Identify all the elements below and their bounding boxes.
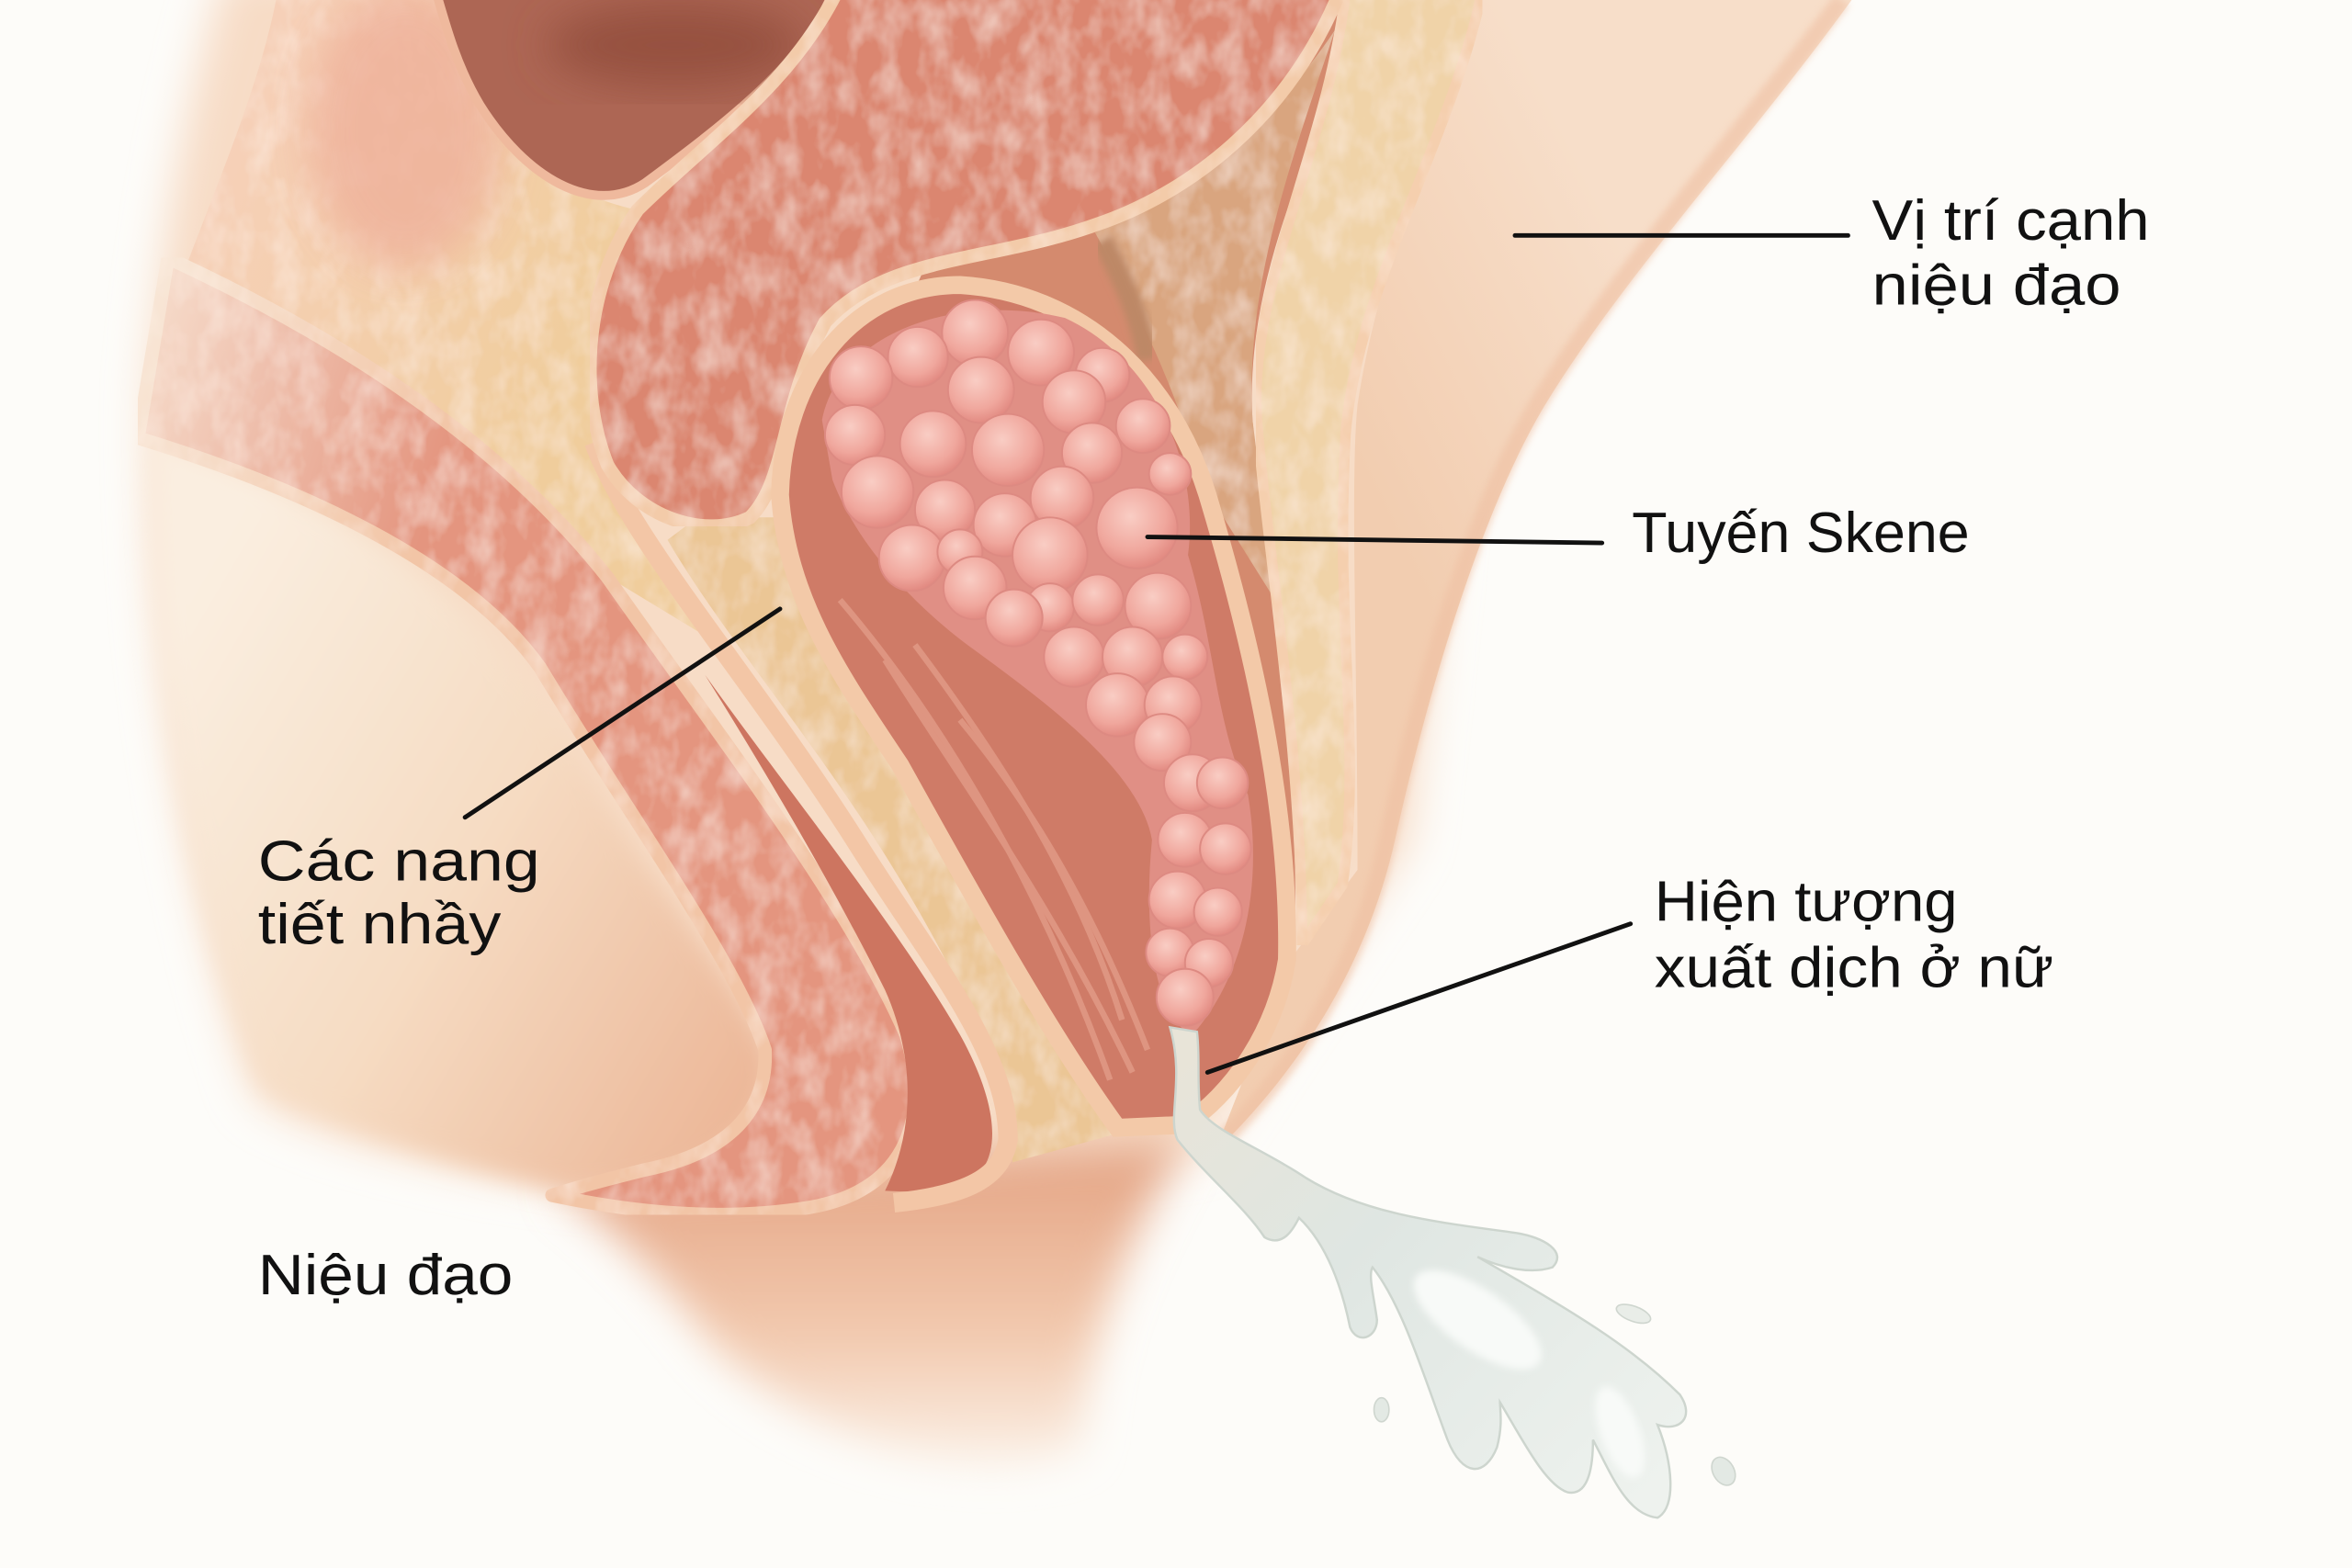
- label: Skene gland: Tuyến Skene: [1632, 502, 1970, 565]
- cavity shade: [548, 3, 802, 87]
- label: female ejaculation: Hiện tượng: [1655, 870, 1958, 933]
- label: paraurethral location: niệu đạo: [1872, 254, 2121, 317]
- Skene gland lobes: [825, 300, 1251, 1026]
- right wall edge shade: [1223, 0, 1842, 1140]
- label: paraurethral location: Vị trí cạnh: [1872, 189, 2150, 253]
- fat strip right: [1256, 0, 1482, 945]
- label: paraurethral location: [1872, 189, 2150, 317]
- tan shaded pocket: [1095, 30, 1335, 600]
- label: urethra: Niệu đạo: [258, 1244, 513, 1307]
- pocket muscle streaks: [840, 600, 1148, 1080]
- lower left tissue: [150, 435, 773, 1192]
- label: mucous follicles: [258, 829, 540, 956]
- label: mucous follicles: tiết nhầy: [258, 893, 501, 956]
- pocket dark crease: [1102, 240, 1148, 360]
- upper organ wall: [590, 0, 1342, 526]
- red muscle layer: [705, 675, 992, 1191]
- gland pocket: [780, 285, 1287, 1128]
- lower tissue fade: [555, 1140, 1185, 1463]
- lower-left wall band: [138, 258, 915, 1214]
- right skin wall: [1215, 0, 1857, 1152]
- dark upper cavity: [435, 0, 834, 196]
- label: female ejaculation: xuất dịch ở nữ: [1655, 936, 2053, 999]
- gland base: [822, 310, 1253, 1035]
- deep tissue behind gland: [780, 0, 1350, 1140]
- label: female ejaculation: [1655, 870, 2053, 999]
- second thin layer: [594, 443, 1008, 1202]
- label: mucous follicles: Các nang: [258, 829, 540, 893]
- fluid discharge: [1170, 1027, 1740, 1517]
- leader lines: [465, 235, 1848, 1072]
- upper pink mottling: [308, 0, 503, 270]
- tan connective tissue: [668, 517, 1122, 1162]
- upper fat tissue: [187, 0, 720, 645]
- outer tissue silhouette: [149, 0, 1500, 1200]
